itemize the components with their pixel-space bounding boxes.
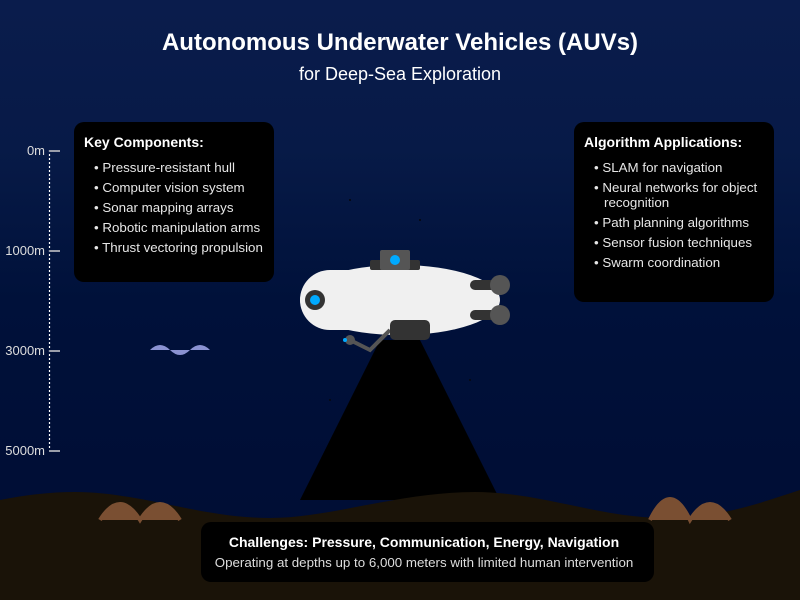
seabed rocks left [100, 504, 180, 520]
panel: algorithm applications: • SLAM for navigation [594, 160, 722, 175]
icon: fish silhouette [150, 345, 210, 355]
panel: challenges [201, 522, 654, 582]
front camera [305, 290, 325, 310]
marine particles [329, 199, 471, 401]
panel: algorithm applications: • Swarm coordination [594, 255, 720, 270]
panel: key components: • Thrust vectoring propulsion [94, 240, 263, 255]
robotic arm [343, 330, 390, 350]
panel: algorithm applications [574, 122, 774, 302]
hull [300, 265, 500, 335]
light beam [300, 340, 500, 500]
panel: key components: • Pressure-resistant hull [94, 160, 235, 175]
panel: key components: • Computer vision system [94, 180, 245, 195]
upper thruster [470, 275, 510, 295]
depth scale [5, 143, 60, 458]
payload pod [390, 320, 430, 340]
panel: algorithm applications: recognition [604, 195, 669, 210]
panel: key components: • Robotic manipulation arms [94, 220, 260, 235]
panel: key components: • Sonar mapping arrays [94, 200, 234, 215]
title: Autonomous Underwater Vehicles (AUVs) [162, 29, 638, 56]
panel: algorithm applications: Algorithm Applications: [584, 134, 742, 150]
seabed [0, 490, 800, 600]
depth scale: 1000m [5, 243, 45, 258]
panel: key components: Key Components: [84, 134, 204, 150]
subtitle: for Deep-Sea Exploration [299, 64, 501, 84]
panel: key components [74, 122, 274, 282]
panel: algorithm applications: • Path planning algorithms [594, 215, 749, 230]
panel: algorithm applications: • Neural networks for object [594, 180, 757, 195]
depth scale: 0m [27, 143, 45, 158]
seabed rocks right [650, 499, 730, 520]
depth scale: 5000m [5, 443, 45, 458]
panel: challenges: Operating at depths up to 6,000 meters with limited human intervention [215, 555, 633, 570]
AUV vehicle [300, 250, 510, 350]
panel: challenges: Challenges: Pressure, Communication, Energy, Navigation [229, 534, 619, 550]
panel: algorithm applications: • Sensor fusion techniques [594, 235, 752, 250]
lower thruster [470, 305, 510, 325]
depth scale: 3000m [5, 343, 45, 358]
top sensor mount [370, 250, 420, 270]
